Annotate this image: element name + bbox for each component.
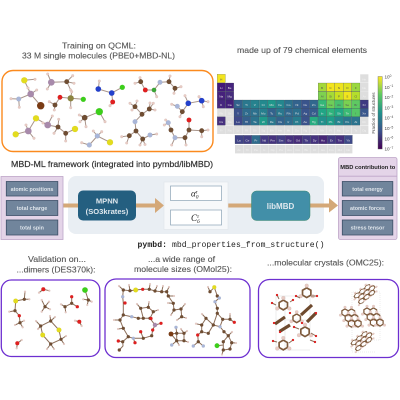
chart: periodic table heat map: Zn [312, 103, 316, 107]
legend: colour bar fraction of structures: −2 [390, 94, 393, 98]
chart: periodic table heat map: Eu [288, 138, 292, 142]
dimer: methane [41, 299, 51, 313]
chart: periodic table heat map [217, 74, 368, 153]
chart: periodic table heat map: Ga [320, 103, 324, 107]
chart: periodic table heat map: Si [329, 95, 332, 99]
output: atomic forces: atomic forces [350, 206, 385, 212]
chart: periodic table heat map: Es [321, 148, 325, 152]
chart: periodic table heat map: H [220, 77, 222, 81]
right sheet [361, 305, 386, 326]
chart: periodic table heat map: Ag [303, 111, 307, 115]
title: wide range of molecule sizes: molecule sizes (OMol25): [134, 265, 232, 274]
molecule 4 [13, 115, 78, 142]
output heading: MBD contribution to [340, 165, 396, 171]
dimer: water 2 [74, 320, 83, 327]
chart: periodic table heat map: La [237, 138, 241, 142]
chart: periodic table heat map: Nb [253, 111, 257, 115]
chart: periodic table heat map: In [321, 111, 324, 115]
chart: periodic table heat map: Th [246, 148, 249, 152]
chart: periodic table heat map: Fr [220, 129, 223, 133]
box: MPNN: (SO3krates) [86, 207, 129, 216]
legend: colour bar fraction of structures: −4 [390, 115, 393, 119]
chart: periodic table heat map: Tl [321, 120, 324, 124]
chart: periodic table heat map: Gd [296, 138, 300, 142]
chart: periodic table heat map: Nh [320, 129, 324, 133]
chart: periodic table heat map: S [346, 95, 348, 99]
chart: periodic table heat map: Al [321, 95, 324, 99]
chart: periodic table heat map: Am [287, 148, 292, 152]
chart: periodic table heat map: Pr [254, 138, 257, 142]
crystal: polycyclic aromatic packing [339, 279, 386, 353]
chart: periodic table heat map: Tb [304, 138, 308, 142]
title: validation on dimers [16, 255, 96, 274]
small bicyclic molecule [169, 326, 189, 347]
box: libMBD [252, 191, 310, 220]
input: total spin: total spin [20, 226, 44, 232]
legend: colour bar fraction of structures: Fraction of structures [371, 92, 376, 134]
chart: periodic table heat map: Pd [295, 111, 299, 115]
chart: periodic table heat map: Sg [261, 129, 265, 133]
chart: periodic table heat map: Er [330, 138, 333, 142]
chart: periodic table heat map: Lu [236, 120, 240, 124]
legend: colour bar fraction of structures: 10 [384, 74, 390, 80]
panel: outputs [338, 158, 397, 240]
chart: periodic table heat map: Tc [270, 111, 274, 115]
stack bottom [347, 326, 377, 353]
chart: periodic table heat map: Co [287, 103, 291, 107]
dimer: ether with sulfur [8, 291, 30, 328]
chart: periodic table heat map: K [220, 103, 223, 107]
chart: periodic table heat map: N [338, 86, 340, 90]
chart: periodic table heat map: Cn [312, 129, 316, 133]
legend: colour bar fraction of structures: 10 [384, 95, 390, 100]
legend: colour bar fraction of structures [371, 74, 393, 152]
chart: periodic table heat map: Hg [312, 120, 316, 124]
stack top [350, 279, 380, 306]
chart: periodic table heat map: Xe [362, 111, 366, 115]
molecule 3 [48, 90, 86, 111]
formula: alpha: α [191, 188, 196, 198]
chart: periodic table heat map: Fe [278, 103, 282, 107]
chart: periodic table heat map: Mo [261, 111, 266, 115]
chart: periodic table heat map: Ho [321, 138, 325, 142]
chart: periodic table heat map: Au [303, 120, 307, 124]
box: MPNN: MPNN [96, 196, 118, 206]
formula: C6 [170, 210, 222, 225]
molecule 8 [134, 75, 182, 98]
chart: periodic table heat map: Rn [362, 120, 366, 124]
chart: periodic table heat map: Rf [245, 129, 248, 133]
chart: periodic table heat map: Kr [363, 103, 366, 107]
dimer: water [38, 287, 50, 294]
chart: periodic table heat map: Lr [237, 129, 239, 133]
legend: colour bar fraction of structures: −5 [390, 125, 393, 129]
chart: periodic table heat map: Fl [329, 129, 332, 133]
legend: colour bar fraction of structures: 0 [390, 74, 392, 78]
chart: periodic table heat map: Cl [354, 95, 358, 99]
chart: periodic table heat map: Sb [337, 111, 341, 115]
chart: periodic table heat map: V [254, 103, 257, 107]
chart: periodic table heat map: Rb [219, 111, 223, 115]
chart: periodic table heat map: Y [237, 111, 239, 115]
chart: periodic table heat map: Hf [245, 120, 248, 124]
drug-like molecule [192, 285, 237, 356]
chart: periodic table heat map: Li [220, 86, 223, 90]
formula: C6: 6 [197, 219, 200, 225]
molecule 9 [120, 100, 158, 146]
chart: periodic table heat map: Bk [304, 148, 308, 152]
formula: alpha: 0 [196, 195, 199, 201]
chart: periodic table heat map: Pt [295, 120, 298, 124]
chart: periodic table heat map: B [321, 86, 323, 90]
chart: periodic table heat map: Fm [329, 148, 334, 152]
large molecule [113, 283, 187, 352]
chart: periodic table heat map: Mg [227, 95, 232, 99]
chart: periodic table heat map: Se [345, 103, 349, 107]
chart: periodic table heat map: Sm [279, 138, 284, 142]
chart: periodic table heat map: Mt [287, 129, 290, 133]
title: training on QCML [22, 42, 175, 60]
chart: periodic table heat map: Os [278, 120, 283, 124]
chart: periodic table heat map: Mn [270, 103, 274, 107]
title: validation on dimers: ...dimers (DES370k): [16, 266, 96, 274]
legend: colour bar fraction of structures: 10 [384, 126, 390, 131]
chart: periodic table heat map: Cr [262, 103, 265, 107]
chart: periodic table heat map: Sr [228, 111, 231, 115]
chart: periodic table heat map: Ge [328, 103, 333, 107]
legend: colour bar fraction of structures: −6 [390, 136, 393, 140]
chart: periodic table heat map: U [263, 148, 265, 152]
chart: periodic table heat map: As [337, 103, 341, 107]
chart: periodic table heat map: Yb [346, 138, 350, 142]
chart: periodic table heat map: Nd [262, 138, 266, 142]
arrow: descriptors to libMBD [228, 204, 252, 208]
chart: periodic table heat map: Cu [303, 103, 308, 107]
chart: periodic table heat map: Po [345, 120, 349, 124]
chart: periodic table heat map: At [354, 120, 357, 124]
chart: periodic table heat map: Mc [337, 129, 341, 133]
input: total charge: total charge [17, 206, 47, 212]
dimer: water 3 [15, 339, 23, 349]
chart: periodic table heat map: I [355, 111, 356, 115]
molecule 11 [163, 118, 209, 146]
chart: periodic table heat map: Ne [362, 86, 366, 90]
title: wide range of molecule sizes [134, 255, 232, 274]
panel: framework background [68, 176, 324, 234]
chart: periodic table heat map: Rh [287, 111, 291, 115]
chart: periodic table heat map: Ar [363, 95, 366, 99]
legend: colour bar fraction of structures: 10 [384, 105, 390, 110]
molecule 6 [80, 130, 113, 148]
chart: periodic table heat map: Ac [237, 148, 241, 152]
dimer: acetate [60, 295, 79, 313]
chart: periodic table heat map: Pb [329, 120, 333, 124]
title: wide range of molecule sizes: ...a wide range of [148, 255, 216, 264]
panel: OMol25 molecules [105, 279, 250, 358]
code label: pymbd function: pymbd: mbd_properties_from_structure() [138, 241, 324, 250]
arrow: libMBD to output [310, 198, 338, 212]
panel: inputs [1, 176, 63, 240]
panel: OMC25 crystals [258, 279, 398, 358]
chart: periodic table heat map: Te [346, 111, 349, 115]
title: chemical elements: made up of 79 chemical elements [237, 46, 367, 55]
molecule 10 [170, 94, 209, 118]
legend: colour bar fraction of structures: −1 [390, 84, 393, 88]
chart: periodic table heat map: Ti [245, 103, 248, 107]
title: MBD-ML framework: MBD-ML framework (integrated into pymbd/libMBD) [11, 160, 213, 169]
chart: periodic table heat map: Cs [219, 120, 224, 124]
chart: periodic table heat map: Ce [245, 138, 250, 142]
chart: periodic table heat map: Ru [278, 111, 282, 115]
chart: periodic table heat map: Tm [338, 138, 342, 142]
chart: periodic table heat map: Ca [228, 103, 232, 107]
formula: C6: C [191, 213, 197, 223]
left sheet [339, 306, 364, 328]
chart: periodic table heat map: C [329, 86, 332, 90]
chart: periodic table heat map: Cd [312, 111, 316, 115]
chart: periodic table heat map: Lv [346, 129, 349, 133]
chart: periodic table heat map: Og [362, 129, 367, 133]
chart: periodic table heat map: Ba [228, 120, 232, 124]
chart: periodic table heat map: W [262, 120, 265, 124]
crystal: acid packing [271, 284, 318, 350]
chart: periodic table heat map: Ra [228, 129, 232, 133]
chart: periodic table heat map: Db [253, 129, 257, 133]
chart: periodic table heat map: Rg [303, 129, 308, 133]
chart: periodic table heat map: No [346, 148, 350, 152]
chart: periodic table heat map: Md [338, 148, 342, 152]
chart: periodic table heat map: Pu [279, 148, 283, 152]
output: total energy: total energy [352, 187, 383, 193]
chart: periodic table heat map: Cf [313, 148, 316, 152]
chart: periodic table heat map: P [338, 95, 340, 99]
title: validation on dimers: Validation on... [28, 255, 86, 264]
input: atomic positions: atomic positions [11, 187, 53, 193]
chart: periodic table heat map: Zr [245, 111, 248, 115]
chart: periodic table heat map: F [355, 86, 357, 90]
panel: dimers [1, 280, 100, 356]
chart: periodic table heat map: Pm [270, 138, 275, 142]
box: alpha and C6 descriptors [164, 182, 228, 230]
chart: periodic table heat map: Bh [270, 129, 274, 133]
formula: alpha: τ [196, 190, 199, 196]
chart: periodic table heat map: Be [228, 86, 232, 90]
legend: colour bar fraction of structures: 10 [384, 116, 390, 121]
output: stress tensor: stress tensor [351, 226, 385, 232]
molecule 2 [46, 73, 75, 91]
formula: C6: τ [197, 214, 200, 220]
chart: periodic table heat map: Cm [295, 148, 301, 152]
legend: colour bar fraction of structures: 10 [384, 136, 390, 141]
chart: periodic table heat map: Ni [295, 103, 299, 107]
molecule 1 [10, 77, 44, 109]
legend: colour bar fraction of structures: 10 [384, 85, 390, 90]
chart: periodic table heat map: Ts [354, 129, 358, 133]
chart: periodic table heat map: Ta [253, 120, 257, 124]
chart: periodic table heat map: Na [219, 95, 223, 99]
chart: periodic table heat map: Ir [288, 120, 289, 124]
legend: colour bar fraction of structures: −7 [390, 146, 393, 150]
chart: periodic table heat map: O [346, 86, 349, 90]
legend: colour bar fraction of structures: 10 [384, 147, 390, 152]
molecule 5 [78, 108, 106, 128]
legend: colour bar fraction of structures: −3 [390, 105, 393, 109]
chart: periodic table heat map: Bi [338, 120, 341, 124]
chart: periodic table heat map: Pa [254, 148, 258, 152]
chart: periodic table heat map: Re [270, 120, 274, 124]
panel: QCML training molecules [2, 70, 213, 152]
chart: periodic table heat map: Hs [278, 129, 282, 133]
box: libMBD: libMBD [267, 202, 294, 211]
formula: alpha [170, 186, 222, 201]
chart: periodic table heat map: Ds [295, 129, 299, 133]
dimer: chloromethane [82, 287, 93, 306]
chart: periodic table heat map: Np [271, 148, 275, 152]
title: training on QCML: Training on QCML: [62, 42, 136, 50]
chart: periodic table heat map: Dy [313, 138, 317, 142]
chart: periodic table heat map: Br [354, 103, 357, 107]
chart: periodic table heat map: Sc [236, 103, 240, 107]
title: training on QCML: 33 M single molecules (PBE0+MBD-NL) [22, 52, 175, 60]
box: MPNN [78, 190, 136, 220]
dimer: dithiane ring [35, 315, 67, 350]
arrow: input to MPNN to descriptors [63, 198, 164, 213]
title: molecular crystals: ...molecular crystals (OMC25): [267, 258, 384, 268]
chart: periodic table heat map: He [362, 77, 366, 81]
molecule 7 [96, 80, 125, 107]
chart: periodic table heat map: Sn [329, 111, 333, 115]
